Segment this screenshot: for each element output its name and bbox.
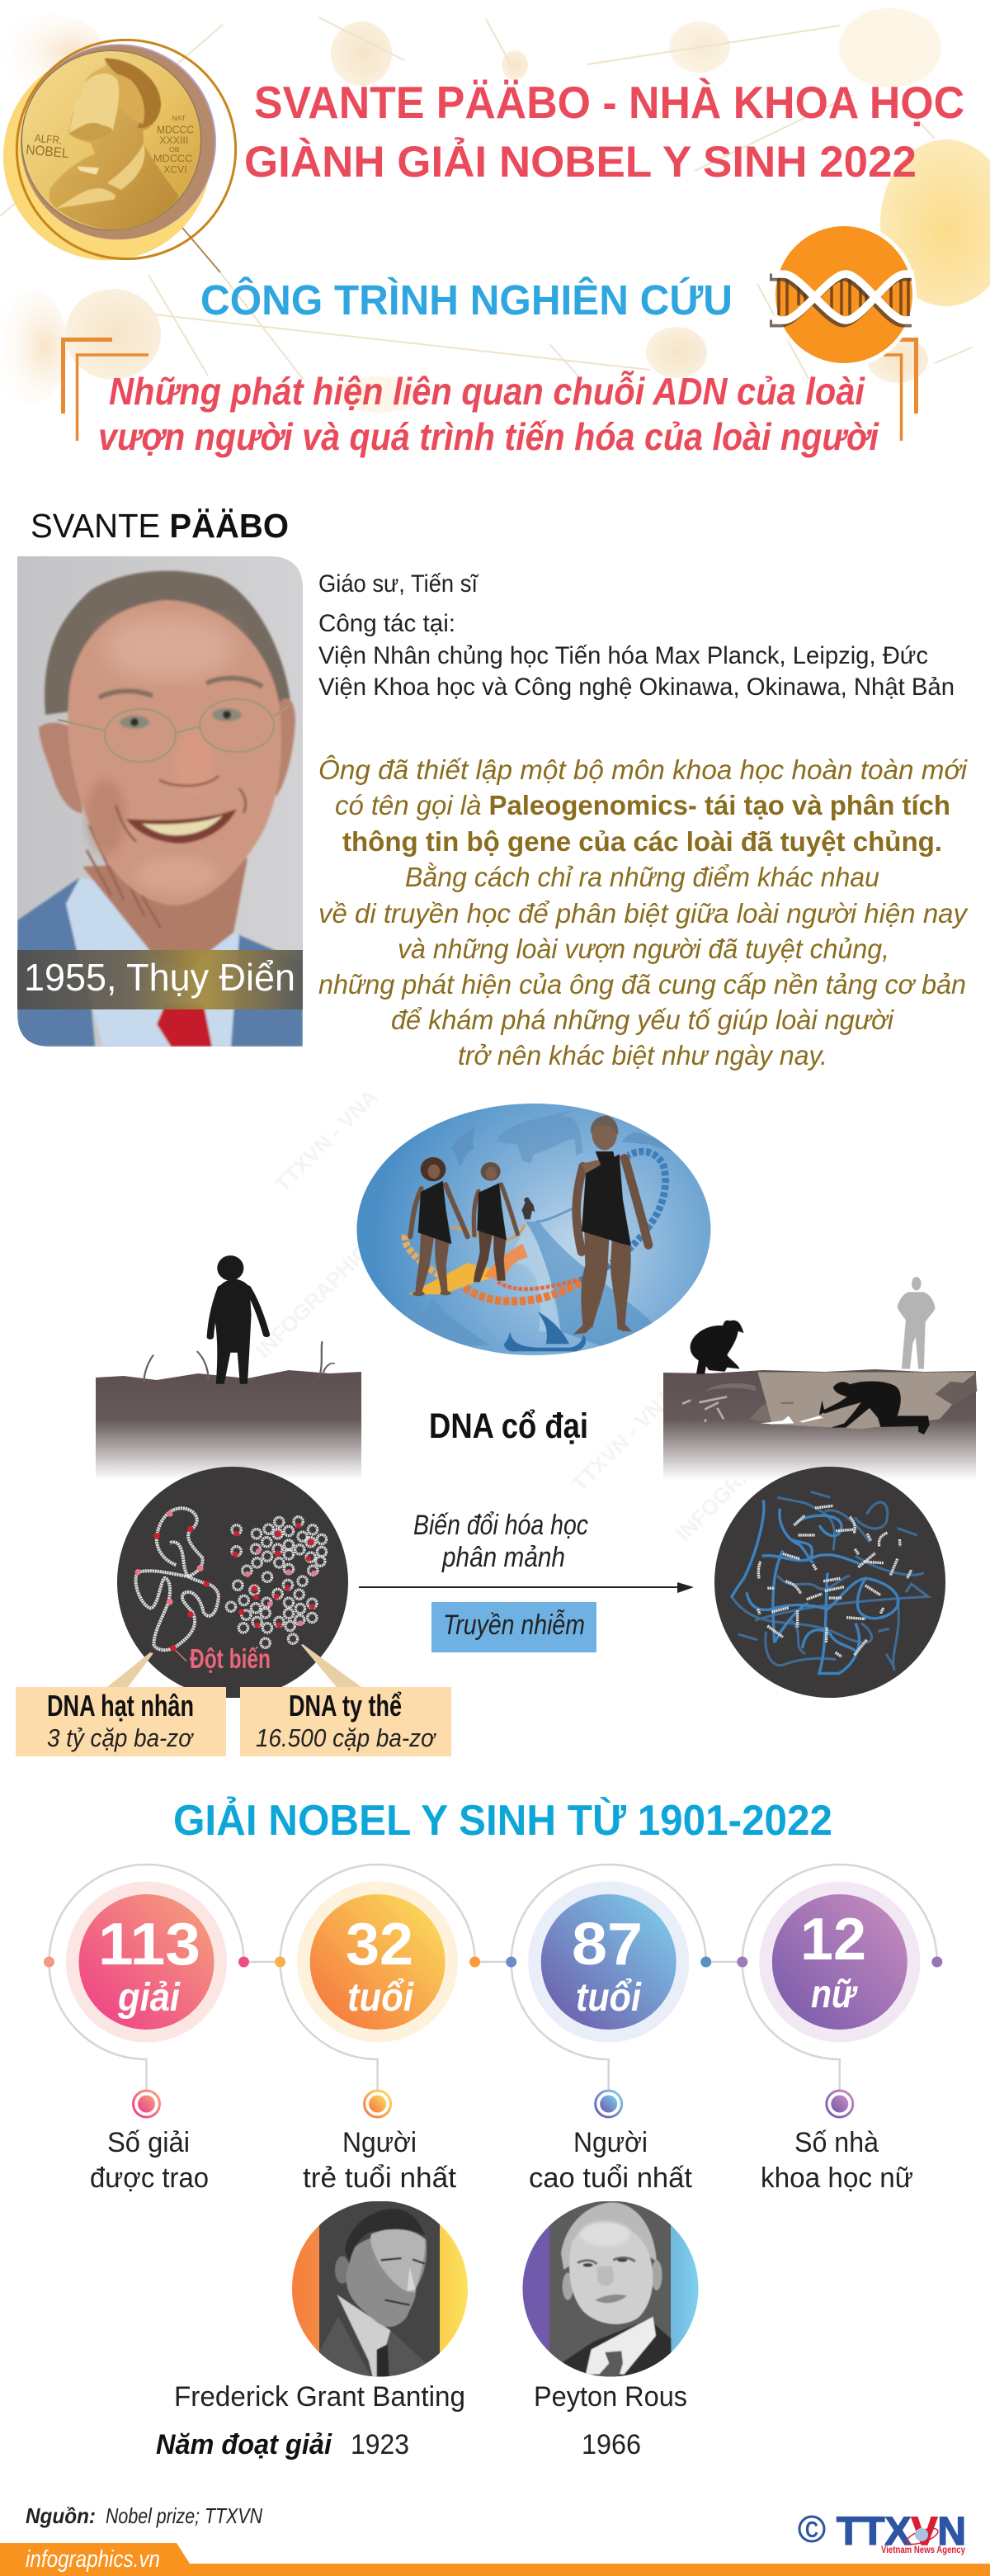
- profile details: Viện Khoa học và Công nghệ Okinawa, Okinawa, Nhật Bản: [318, 674, 955, 701]
- caption: birth year and country: 1955, Thụy Điển: [24, 956, 295, 999]
- surviving ancient fragments: [757, 1505, 912, 1657]
- source: [26, 2503, 262, 2528]
- laureate names: [174, 2381, 687, 2413]
- ear: [335, 2256, 350, 2284]
- portrait: face: [68, 600, 281, 905]
- title: SVANTE PÄÄBO - NHÀ KHOA HỌC: [254, 77, 964, 128]
- box: contamination: Truyền nhiễm: [443, 1609, 585, 1641]
- stat: youngest 32: Người: [342, 2127, 417, 2158]
- stat: 12 women: nữ: [811, 1973, 858, 2016]
- portrait: eyebrows: [99, 678, 262, 697]
- dim strands: [733, 1491, 928, 1671]
- watermarks: TTXVN - VNA: [567, 1383, 680, 1496]
- award years: 1923: [351, 2429, 409, 2460]
- portrait panel: Svante Pääbo: [17, 556, 303, 1047]
- biography text: có tên gọi là Paleogenomics- tái tạo và phân tích: [335, 790, 950, 820]
- bones: [761, 1416, 823, 1424]
- portrait: Frederick Banting: [292, 2201, 468, 2377]
- icon: Nobel medal: OB: [169, 145, 180, 154]
- watermarks: INFOGRAPHICS: [251, 1229, 384, 1363]
- logo: TTXVN: C: [805, 2517, 818, 2542]
- ground: right excavation: [663, 1277, 977, 1480]
- stat: 113 prizes: được trao: [90, 2162, 209, 2194]
- person C: [573, 1116, 648, 1335]
- biography text: Bằng cách chỉ ra những điểm khác nhau: [405, 862, 879, 892]
- caption bar: [17, 950, 303, 1009]
- laureate names: Peyton Rous: [534, 2381, 687, 2413]
- light path: [526, 1222, 653, 1354]
- stat: oldest 87: [506, 1865, 711, 2194]
- bracket frame: [63, 340, 916, 441]
- stat: youngest 32: trẻ tuổi nhất: [303, 2162, 457, 2194]
- portrait: Peyton Rous: [522, 2201, 699, 2377]
- icon: Nobel medal: NOBEL: [26, 142, 69, 161]
- person A: [410, 1157, 468, 1296]
- arrow: [359, 1582, 694, 1593]
- icon: Nobel medal: XXXIII: [159, 135, 188, 146]
- connectors between stats: [244, 1961, 742, 1963]
- label: mutation: Đột biến: [190, 1643, 271, 1674]
- suit: [561, 2319, 671, 2377]
- hair: [345, 2209, 425, 2264]
- ship: [504, 1312, 586, 1351]
- biography text: [318, 754, 969, 1071]
- stat: 12 women: Số nhà: [794, 2127, 879, 2158]
- laureate names: Frederick Grant Banting: [174, 2381, 465, 2413]
- portrait: ears: [39, 698, 295, 813]
- cave paintings: [451, 1110, 676, 1166]
- label: chemical change: phân mảnh: [441, 1542, 565, 1573]
- ground: left: [96, 1255, 361, 1480]
- stat: 12 women: khoa học nữ: [761, 2162, 913, 2194]
- subtitle: vượn người và quá trình tiến hóa của loài người: [98, 415, 879, 458]
- portrait: smile: [126, 809, 237, 844]
- mitochondrial DNA rings: [226, 1517, 327, 1647]
- person B: [474, 1162, 517, 1282]
- suit: [319, 2317, 427, 2377]
- biography text: về di truyền học để phân biệt giữa loài người hiện nay: [318, 898, 969, 929]
- portrait: eyes: [120, 708, 242, 729]
- face: [569, 2223, 653, 2324]
- standing figure: [898, 1277, 935, 1368]
- fossils: [682, 1397, 727, 1422]
- subtitle: Những phát hiện liên quan chuỗi ADN của loài: [109, 370, 865, 413]
- footer band: [0, 2543, 990, 2576]
- face: [346, 2233, 427, 2327]
- title: [244, 77, 964, 187]
- stat: oldest 87: cao tuổi nhất: [529, 2162, 693, 2194]
- stat: oldest 87: Người: [573, 2127, 648, 2158]
- brows and mouth: [381, 2258, 425, 2305]
- biography text: thông tin bộ gene của các loài đã tuyệt chủng.: [342, 826, 942, 857]
- portrait: hair: [45, 571, 290, 715]
- biography text: trở nên khác biệt như ngày nay.: [458, 1040, 827, 1071]
- watermarks: TTXVN - VNA: [270, 1084, 383, 1197]
- portrait: neck: [82, 857, 249, 950]
- heading: Nobel statistics: GIẢI NOBEL Y SINH TỪ 1901-2022: [173, 1796, 832, 1845]
- digger figure: [822, 1381, 930, 1435]
- box: mitochondrial DNA: 16.500 cặp ba-zơ: [256, 1723, 436, 1752]
- silhouette: ancient human: [144, 1255, 335, 1384]
- icon: DNA helix: [770, 222, 917, 367]
- icon: Nobel medal: MDCCC: [153, 153, 193, 164]
- watermarks: [251, 1084, 804, 1546]
- features: [578, 2257, 635, 2264]
- heading: ancient DNA: DNA cổ đại: [429, 1406, 588, 1446]
- helix: [405, 1151, 666, 1302]
- stat: 113 prizes: [44, 1865, 249, 2194]
- excavation pit: [757, 1373, 976, 1429]
- source: Nobel prize; TTXVN: [106, 2503, 262, 2528]
- stat: youngest 32: [275, 1865, 480, 2194]
- box: contamination: [431, 1602, 596, 1652]
- watermarks: INFOGRAPHICS: [671, 1412, 804, 1546]
- icon: Nobel medal: [3, 40, 236, 260]
- subtitle: [98, 370, 879, 458]
- biography text: Ông đã thiết lập một bộ môn khoa học hoàn toàn mới: [318, 754, 969, 785]
- title: GIÀNH GIẢI NOBEL Y SINH 2022: [244, 137, 917, 187]
- biography text: những phát hiện của ông đã cung cấp nền tảng cơ bản: [318, 969, 966, 1000]
- stat: 113 prizes: Số giải: [107, 2127, 190, 2158]
- crouching figure: [691, 1321, 744, 1374]
- source: Nguồn:: [26, 2503, 96, 2528]
- icon: Nobel medal: NAT: [172, 114, 186, 122]
- award years: Năm đoạt giải: [156, 2429, 332, 2460]
- medal text: Alfr. Nobel: ALFR.: [34, 132, 63, 147]
- stat: youngest 32: 32: [346, 1912, 413, 1978]
- biography text: để khám phá những yếu tố giúp loài người: [391, 1004, 895, 1035]
- stat: oldest 87: tuổi: [576, 1976, 642, 2020]
- box: nuclear DNA: DNA hạt nhân: [47, 1689, 194, 1723]
- box: mitochondrial DNA: DNA ty thể: [289, 1689, 402, 1723]
- medal text: dates: MDCCC: [157, 125, 194, 136]
- biography text: và những loài vượn người đã tuyệt chủng,: [398, 934, 889, 964]
- circle: modern DNA sample: [117, 1467, 348, 1698]
- profile details: [318, 570, 955, 701]
- profile details: Giáo sư, Tiến sĩ: [318, 570, 479, 598]
- profile details: Viện Nhân chủng học Tiến hóa Max Planck, Leipzig, Đức: [318, 642, 928, 669]
- portrait: jacket: [17, 877, 303, 1047]
- icon: Nobel medal: XCVI: [163, 163, 187, 175]
- portrait: glasses: [58, 699, 289, 762]
- box: nuclear DNA: 3 tỷ cặp ba-zơ: [47, 1723, 194, 1752]
- circle: degraded ancient DNA: [714, 1467, 945, 1698]
- portrait: shirt: [66, 877, 239, 1047]
- logo: TTXVN: Vietnam News Agency: [881, 2544, 965, 2555]
- stat: 12 women: 12: [800, 1907, 866, 1973]
- stat: 113 prizes: giải: [117, 1976, 182, 2020]
- label: chemical change: [413, 1510, 588, 1573]
- mutation dots: [153, 1523, 315, 1651]
- small figure: [521, 1198, 535, 1219]
- stat: 12 women: [737, 1865, 942, 2194]
- scientist name: SVANTE PÄÄBO: [31, 507, 289, 545]
- collar: [337, 2295, 390, 2377]
- portrait: tie: [157, 1004, 212, 1047]
- label: chemical change: Biến đổi hóa học: [413, 1510, 588, 1541]
- logo: TTXVN: TTXVN: [837, 2510, 966, 2554]
- nuclear DNA strand: [136, 1508, 219, 1650]
- hair: [561, 2202, 657, 2270]
- collar: [586, 2317, 656, 2375]
- stat: oldest 87: 87: [572, 1912, 643, 1978]
- heading: research work: CÔNG TRÌNH NGHIÊN CỨU: [200, 276, 733, 324]
- box: nuclear DNA: [16, 1652, 226, 1756]
- illustration: human evolution sphere: [355, 1098, 714, 1358]
- box: mitochondrial DNA: [240, 1644, 451, 1756]
- road: [408, 1252, 512, 1294]
- footer band: infographics.vn: [26, 2546, 160, 2573]
- mountains: [402, 1298, 489, 1345]
- bright strands: [731, 1501, 898, 1673]
- award years: 1966: [582, 2429, 641, 2460]
- stat: youngest 32: tuổi: [347, 1976, 415, 2020]
- profile details: Công tác tại:: [318, 610, 455, 637]
- stat: 113 prizes: 113: [98, 1912, 200, 1978]
- ears: [563, 2272, 573, 2300]
- award years: [156, 2429, 641, 2460]
